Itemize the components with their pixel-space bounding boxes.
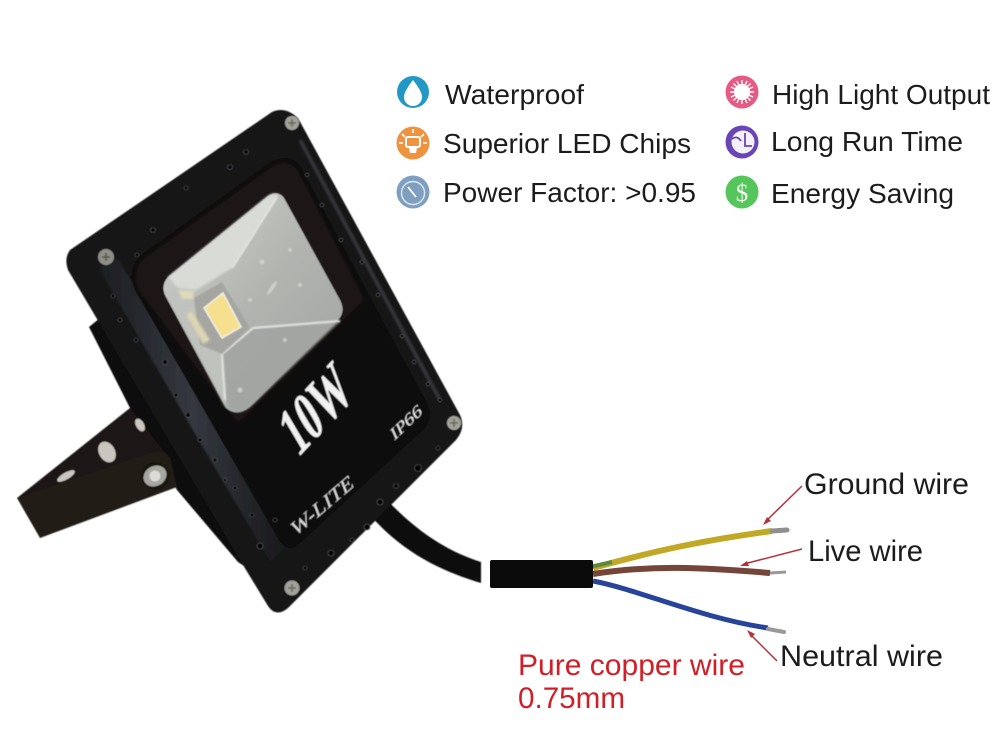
lens: [163, 193, 343, 412]
feature: long run time: [726, 126, 963, 158]
floodlight product photo: [17, 110, 481, 613]
waterproof text: Waterproof: [445, 79, 584, 110]
water droplets: [111, 150, 442, 570]
lens left facet: [166, 292, 226, 408]
housing side sheen: [98, 258, 288, 562]
superior LED chips text: Superior LED Chips: [443, 128, 691, 159]
chip base: [194, 282, 250, 354]
side contact: [186, 312, 210, 344]
icon: clock: [726, 126, 758, 158]
lens reflector edges: [222, 197, 340, 400]
callout: neutral wire: Neutral wire: [780, 640, 943, 673]
power cable: [370, 498, 481, 583]
power factor text: Power Factor: >0.95: [443, 177, 696, 208]
callout: pure copper wire: Pure copper wire: [518, 649, 745, 682]
label: IP66: IP66: [388, 400, 424, 445]
live wire: [593, 568, 786, 574]
arrow: ground wire: [763, 486, 802, 525]
label: 10W: 10W: [268, 347, 363, 471]
callout: live wire: Live wire: [808, 535, 923, 568]
energy saving text: Energy Saving: [771, 178, 954, 209]
feature: superior LED chips: [396, 126, 691, 160]
housing: [66, 110, 462, 613]
upper panel tone: [134, 161, 366, 425]
neutral wire: [593, 581, 784, 632]
lens bright facet: [168, 194, 278, 290]
feature list: [396, 76, 990, 209]
LED chip: [204, 293, 241, 338]
feature: high light output: [726, 76, 990, 110]
lens water marks: [238, 248, 302, 392]
lens lower facet: [222, 321, 340, 412]
arrow: neutral wire: [747, 630, 777, 661]
feature: waterproof: [397, 76, 584, 110]
cable jacket: [490, 560, 593, 588]
icon: gauge: [396, 176, 430, 208]
callout: ground wire: Ground wire: [804, 468, 969, 501]
long run time text: Long Run Time: [771, 126, 963, 157]
feature: energy saving: [726, 176, 954, 209]
icon: light bulb: [396, 126, 430, 160]
rear mounting plate: [89, 318, 250, 570]
callout: live wire: [740, 535, 923, 568]
mounting bracket: [17, 408, 177, 538]
icon: dollar: $: [736, 180, 748, 207]
front panel: [132, 158, 430, 548]
callout: ground wire: [763, 468, 969, 525]
icon: water drop: [397, 76, 429, 108]
callout: neutral wire: [747, 630, 943, 673]
label: W-LITE: W-LITE: [289, 470, 356, 542]
icon: sunburst: [726, 76, 758, 108]
housing right rim: [300, 140, 440, 400]
callout: pure copper wire: [518, 649, 745, 715]
stripped cable: [490, 530, 787, 632]
arrow: live wire: [740, 549, 802, 566]
icon: dollar: [726, 176, 758, 208]
corner screws: [98, 116, 461, 596]
ground wire: [590, 530, 787, 568]
callout: pure copper wire: 0.75mm: [518, 682, 625, 715]
feature: power factor: [396, 176, 696, 208]
high light output text: High Light Output: [772, 79, 990, 110]
